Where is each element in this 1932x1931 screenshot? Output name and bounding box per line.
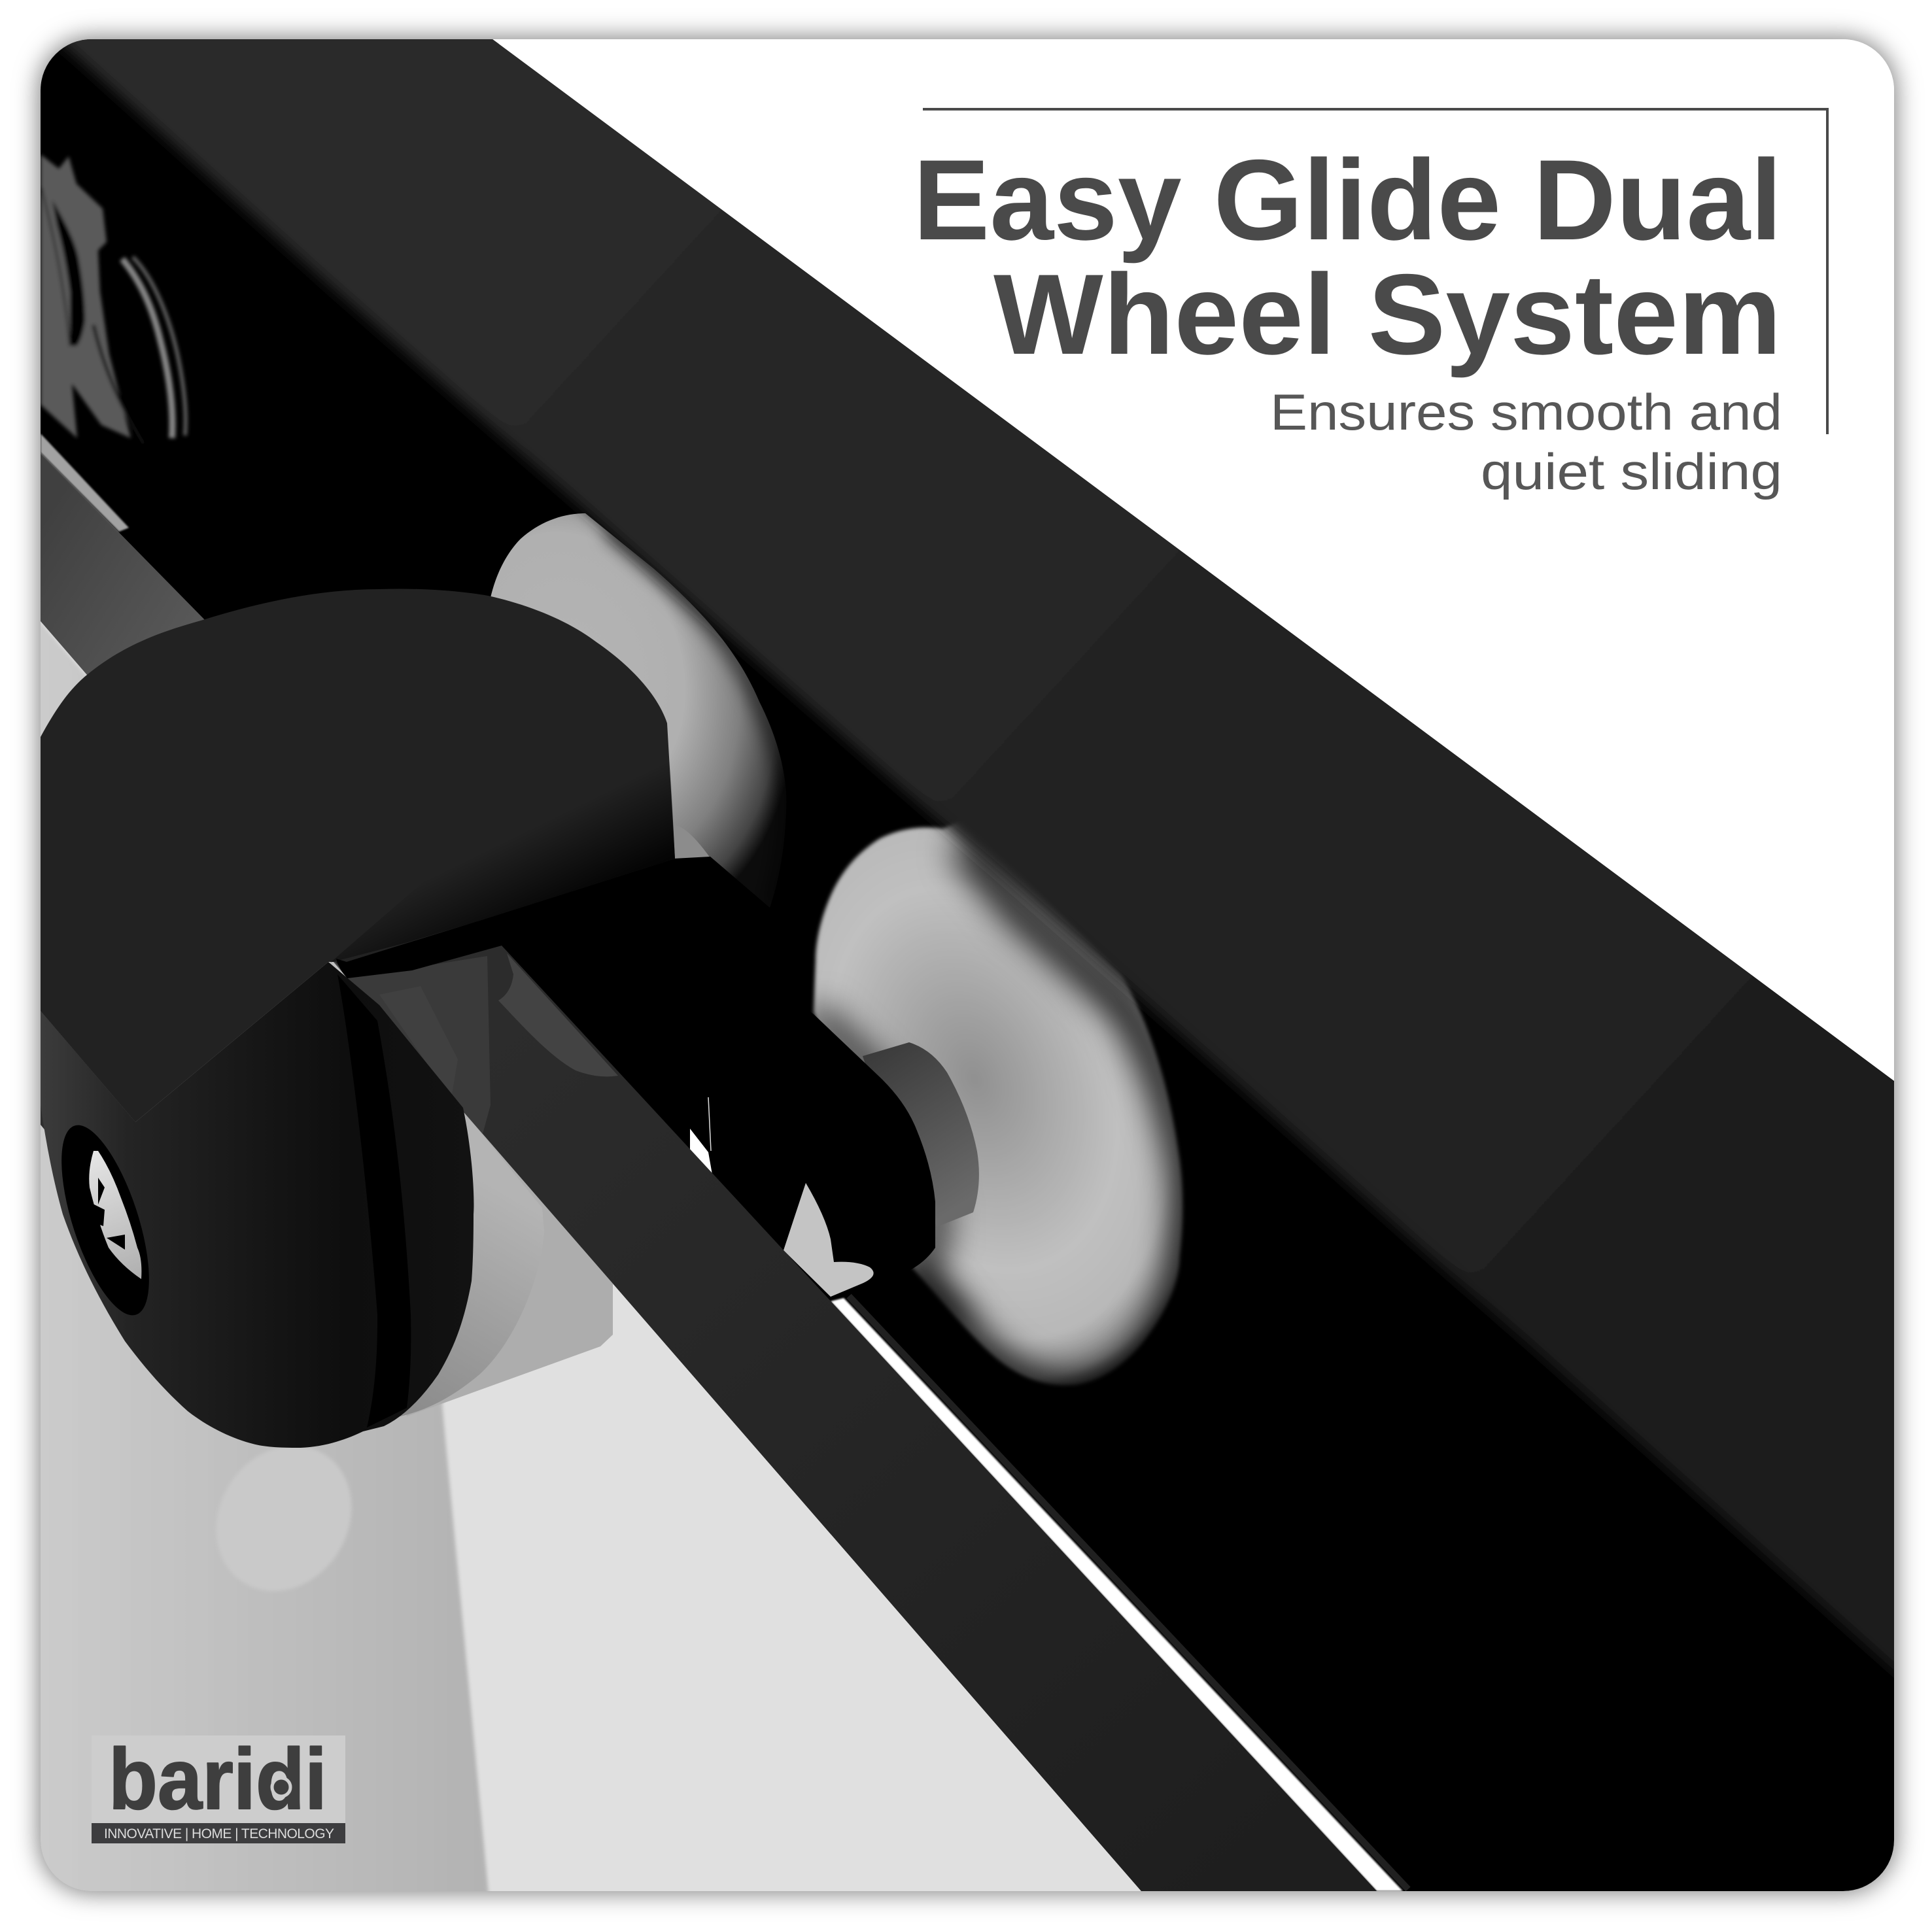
handle slot — [336, 921, 502, 978]
shaded floor area — [41, 622, 490, 1891]
strip edge — [849, 1296, 1408, 1889]
axle and carriage — [654, 857, 935, 1298]
glimpsed white slit — [690, 1129, 712, 1174]
bracket foot — [784, 1183, 874, 1297]
logo eye ring — [272, 1778, 290, 1796]
handle body — [41, 962, 474, 1448]
back wheel edge shading — [608, 530, 786, 908]
wheel shadow along axle — [814, 1012, 961, 1324]
translucent plate — [407, 1118, 613, 1416]
bracket edge — [94, 325, 144, 444]
logo tagline: INNOVATIVE | HOME | TECHNOLOGY — [104, 1826, 334, 1841]
grey wall wedge — [41, 453, 209, 675]
logo — [92, 1731, 345, 1843]
grey strip — [41, 434, 129, 532]
title — [913, 137, 1782, 379]
handle top shading — [330, 732, 675, 963]
back wheel hub — [674, 825, 710, 861]
translucent wheel crescent — [400, 1275, 525, 1416]
bracket — [41, 154, 131, 438]
handle black groove — [337, 974, 411, 1427]
screw recess — [43, 1116, 167, 1325]
light floor — [41, 621, 1141, 1891]
screw cross slot — [92, 1178, 125, 1250]
bracket crescent — [52, 200, 85, 346]
subtitle line one: Ensures smooth and — [1270, 383, 1782, 441]
rail glass highlight — [379, 986, 458, 1099]
thin white line — [708, 1097, 711, 1151]
subtitle line two: quiet sliding — [1481, 443, 1782, 500]
rail glass section — [347, 956, 491, 1134]
wheel rim — [122, 259, 173, 438]
back wheel — [491, 513, 786, 908]
handle roller — [41, 589, 675, 1448]
rail glass crescent — [498, 953, 618, 1076]
lower rail — [347, 946, 1377, 1891]
front wheel — [814, 817, 1182, 1385]
logo wordmark: baridi — [109, 1731, 327, 1827]
wheel rim outer — [133, 257, 186, 436]
screw head — [89, 1151, 141, 1279]
subtitle — [1270, 383, 1782, 500]
title line two: Wheel System — [993, 251, 1782, 379]
wheel outer edge shading — [913, 844, 1189, 1393]
floor reflection spot — [218, 1448, 351, 1590]
handle side face — [41, 1011, 137, 1242]
logo tagline bar — [92, 1823, 345, 1843]
distant hardware — [41, 154, 186, 444]
white light gap — [831, 1298, 1403, 1891]
wheel hub — [863, 1042, 979, 1227]
handle top surface — [41, 589, 675, 1122]
bracket slot — [41, 188, 70, 346]
title frame rule — [923, 109, 1827, 434]
logo background — [92, 1735, 345, 1823]
title line one: Easy Glide Dual — [913, 137, 1782, 264]
